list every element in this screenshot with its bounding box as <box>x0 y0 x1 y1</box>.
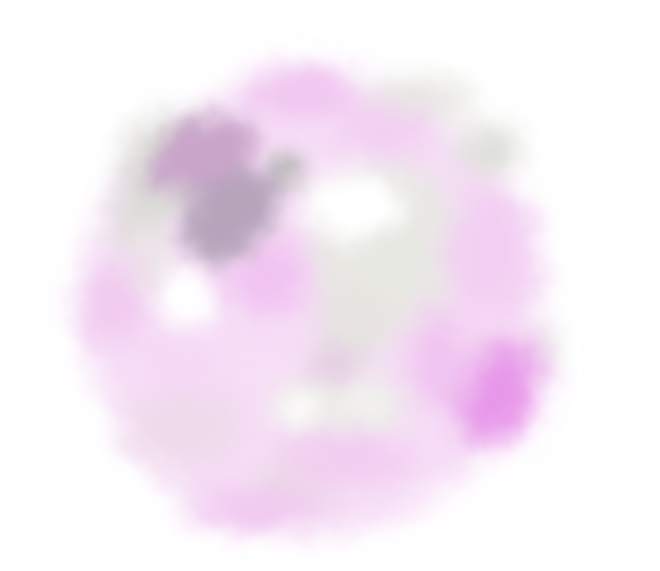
pale grey centre washes <box>124 161 461 502</box>
pink base wash <box>84 77 540 533</box>
dark mauve patches at upper left <box>136 102 305 279</box>
white highlights <box>154 171 402 428</box>
pink accents <box>78 68 532 526</box>
strong pink patch at lower right <box>442 326 558 458</box>
grey rim at upper left and upper right <box>111 80 557 372</box>
